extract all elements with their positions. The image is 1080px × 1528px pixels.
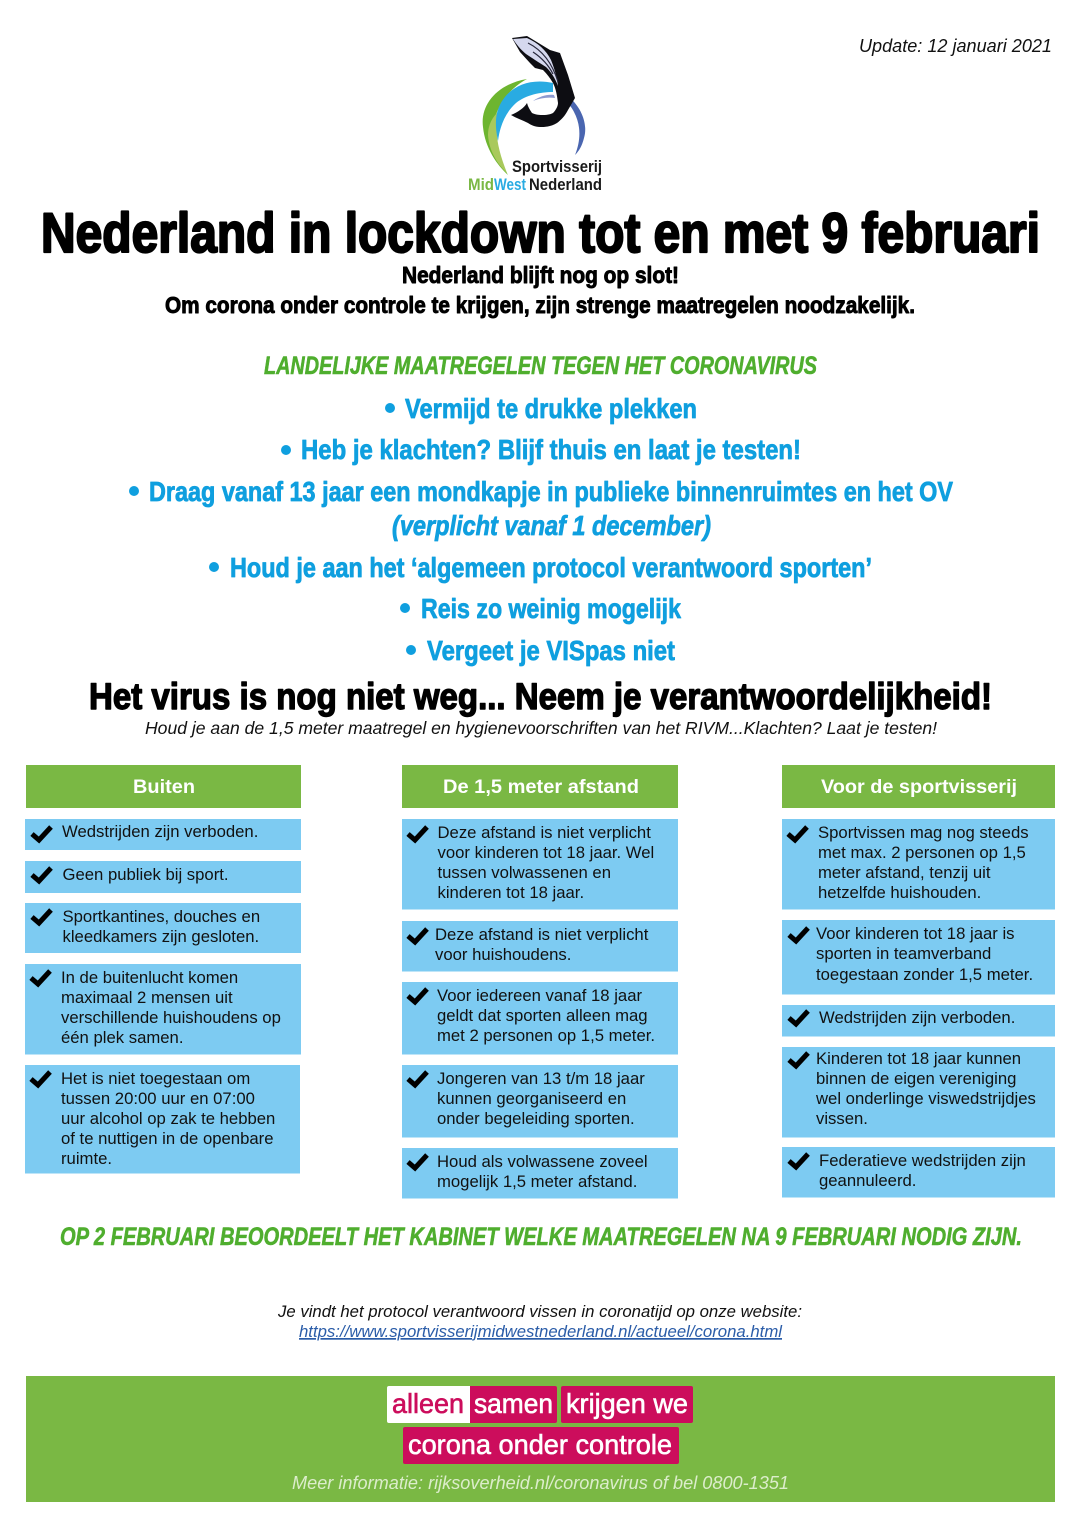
- item: één plek samen.: [61, 1028, 183, 1047]
- panel header: Buiten: [133, 777, 195, 798]
- item: uur alcohol op zak te hebben: [61, 1109, 275, 1128]
- item: verschillende huishoudens op: [61, 1008, 281, 1027]
- item: In de buitenlucht komen: [61, 968, 238, 987]
- item: onder begeleiding sporten.: [437, 1109, 635, 1128]
- logo text: West: [494, 175, 526, 194]
- item: toegestaan zonder 1,5 meter.: [816, 965, 1033, 984]
- item: binnen de eigen vereniging: [816, 1069, 1016, 1088]
- list of national measures: (verplicht vanaf 1 december): [392, 510, 711, 541]
- item: of te nuttigen in de openbare: [61, 1129, 273, 1148]
- website note: [277, 1302, 802, 1341]
- item: geldt dat sporten alleen mag: [437, 1006, 648, 1025]
- panel: Voor de sportvisserij: [782, 765, 1055, 1198]
- logo text: Nederland: [529, 175, 602, 194]
- item: [782, 1147, 1055, 1198]
- panel: Buiten: [25, 765, 301, 1174]
- item: [402, 1065, 678, 1138]
- icon: blue swoosh: [496, 82, 553, 141]
- panel header: [26, 765, 301, 808]
- website note: https://www.sportvisserijmidwestnederland.nl/actueel/corona.html: [299, 1322, 783, 1341]
- item: Kinderen tot 18 jaar kunnen: [816, 1049, 1021, 1068]
- campaign logo: alleen samen krijgen we corona onder controle: alleen: [392, 1388, 464, 1419]
- item: Wedstrijden zijn verboden.: [62, 822, 258, 841]
- item: Geen publiek bij sport.: [62, 865, 229, 884]
- item: Voor iedereen vanaf 18 jaar: [437, 986, 642, 1005]
- heading: landelijke maatregelen: LANDELIJKE MAATREGELEN TEGEN HET CORONAVIRUS: [264, 352, 817, 380]
- item: maximaal 2 mensen uit: [61, 988, 233, 1007]
- item: Het is niet toegestaan om: [61, 1069, 250, 1088]
- item: [782, 1005, 1055, 1036]
- footer banner: [26, 1376, 1055, 1502]
- item: [782, 819, 1055, 910]
- icon: fish highlight: [513, 38, 558, 86]
- item: [25, 819, 301, 850]
- slogan: Het virus is nog niet weg... Neem je verantwoordelijkheid!: [89, 676, 992, 717]
- icon: light green swoosh: [488, 105, 508, 173]
- list of national measures: [129, 393, 953, 666]
- item: [25, 964, 301, 1054]
- panel: De 1,5 meter afstand: [402, 765, 678, 1198]
- item: Federatieve wedstrijden zijn: [819, 1151, 1026, 1170]
- item: kleedkamers zijn gesloten.: [62, 927, 259, 946]
- icon: green crescent: [483, 79, 527, 175]
- item: [782, 920, 1055, 994]
- item: [402, 921, 678, 972]
- list of national measures: Reis zo weinig mogelijk: [421, 593, 681, 624]
- item: geannuleerd.: [819, 1171, 916, 1190]
- subtitle: [165, 262, 915, 318]
- logo text: Sportvisserij: [512, 157, 602, 176]
- item: vissen.: [816, 1109, 868, 1128]
- item: [402, 982, 678, 1054]
- item: Sportkantines, douches en: [62, 907, 260, 926]
- campaign logo: alleen samen krijgen we corona onder controle: corona onder controle: [408, 1429, 672, 1460]
- item: Sportvissen mag nog steeds: [818, 823, 1029, 842]
- update date: Update: 12 januari 2021: [859, 36, 1052, 56]
- item: mogelijk 1,5 meter afstand.: [437, 1172, 637, 1191]
- campaign logo: alleen samen krijgen we corona onder controle: [387, 1386, 693, 1464]
- item: voor huishoudens.: [435, 945, 571, 964]
- item: [782, 1047, 1055, 1138]
- subtitle: Nederland blijft nog op slot!: [402, 262, 679, 288]
- item: kinderen tot 18 jaar.: [438, 883, 584, 902]
- logo text: Mid: [468, 175, 494, 194]
- list of national measures: Heb je klachten? Blijf thuis en laat je testen!: [301, 434, 801, 465]
- item: Houd als volwassene zoveel: [437, 1152, 648, 1171]
- website note: Je vindt het protocol verantwoord vissen in coronatijd op onze website:: [277, 1302, 802, 1321]
- item: [402, 1148, 678, 1198]
- icon: fish stripes: [528, 43, 558, 82]
- icon: purple arc: [566, 97, 585, 155]
- panel header: [402, 765, 678, 808]
- item: met max. 2 personen op 1,5: [818, 843, 1026, 862]
- logo text: [468, 157, 602, 194]
- panel header: [782, 765, 1055, 808]
- item: ruimte.: [61, 1149, 112, 1168]
- item: meter afstand, tenzij uit: [818, 863, 991, 882]
- icon: purple small swoosh: [533, 95, 555, 101]
- item: met 2 personen op 1,5 meter.: [437, 1026, 655, 1045]
- item: Deze afstand is niet verplicht: [435, 925, 649, 944]
- list of national measures: Houd je aan het ‘algemeen protocol verantwoord sporten’: [230, 552, 872, 583]
- item: hetzelfde huishouden.: [818, 883, 981, 902]
- logo: Sportvisserij MidWest Nederland: [468, 36, 602, 194]
- subtitle: Om corona onder controle te krijgen, zijn strenge maatregelen noodzakelijk.: [165, 292, 915, 318]
- item: wel onderlinge viswedstrijdjes: [815, 1089, 1036, 1108]
- campaign logo: alleen samen krijgen we corona onder controle: samen: [474, 1388, 553, 1419]
- icon: fish: [511, 36, 575, 127]
- item: [25, 861, 301, 893]
- list of national measures: Vergeet je VISpas niet: [427, 635, 675, 666]
- footer contact line: Meer informatie: rijksoverheid.nl/coronavirus of bel 0800-1351: [292, 1472, 789, 1493]
- item: kunnen georganiseerd en: [437, 1089, 626, 1108]
- panel header: Voor de sportvisserij: [821, 777, 1017, 798]
- item: sporten in teamverband: [816, 944, 991, 963]
- item: Voor kinderen tot 18 jaar is: [816, 924, 1015, 943]
- item: voor kinderen tot 18 jaar. Wel: [438, 843, 654, 862]
- item: tussen 20:00 uur en 07:00: [61, 1089, 255, 1108]
- campaign logo: alleen samen krijgen we corona onder controle: krijgen we: [566, 1388, 688, 1419]
- list of national measures: Vermijd te drukke plekken: [405, 393, 697, 424]
- item: Wedstrijden zijn verboden.: [819, 1008, 1015, 1027]
- item: Jongeren van 13 t/m 18 jaar: [437, 1069, 645, 1088]
- item: [25, 903, 301, 953]
- item: tussen volwassenen en: [438, 863, 611, 882]
- panel header: De 1,5 meter afstand: [443, 777, 639, 798]
- item: [402, 819, 678, 910]
- slogan subtext: Houd je aan de 1,5 meter maatregel en hygienevoorschriften van het RIVM...Klachten? Laat je testen!: [145, 718, 937, 738]
- item: Deze afstand is niet verplicht: [438, 823, 651, 842]
- item: [25, 1065, 300, 1174]
